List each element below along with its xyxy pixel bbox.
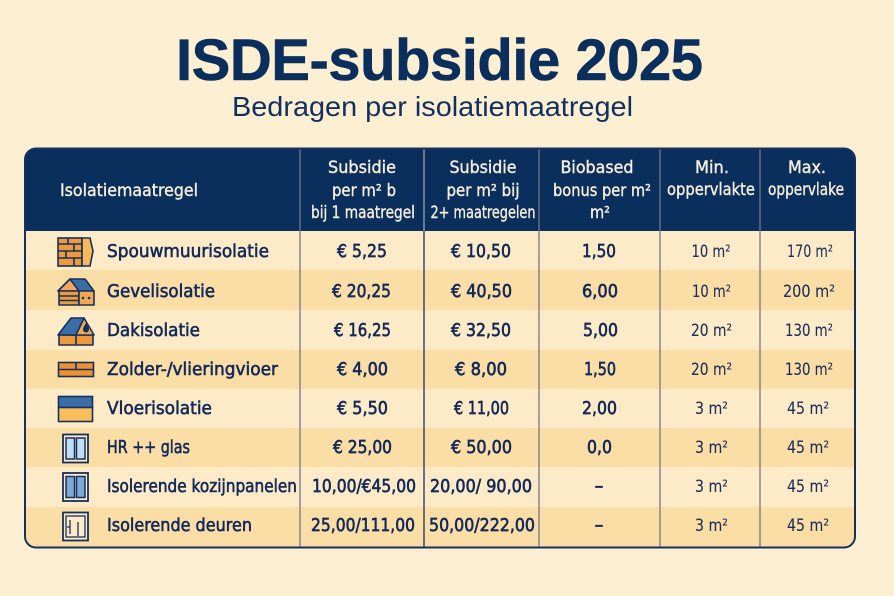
row: Spouwmuurisolatie: 170 m² <box>787 242 833 262</box>
row: Dakisolatie: € 32,50 <box>451 321 511 341</box>
row: Isolerende deuren: 3 m² <box>695 516 728 536</box>
icon: house with roof insulation <box>58 318 94 345</box>
header labels: Isolatiemaatregel <box>60 181 198 200</box>
row: Dakisolatie <box>58 318 833 345</box>
icon drop <box>83 323 89 332</box>
icon dots <box>82 297 90 299</box>
header labels: 2+ maatregelen <box>430 203 536 222</box>
row: Gevelisolatie <box>58 279 835 305</box>
row: Isolerende deuren: 50,00/222,00 <box>429 516 535 536</box>
column dividers <box>300 148 760 547</box>
row: HR ++ glas: 0,0 <box>587 438 612 458</box>
row: Spouwmuurisolatie: 10 m² <box>692 242 730 262</box>
header labels: bonus per m² <box>553 181 651 200</box>
header labels: Subsidie <box>450 158 516 177</box>
header labels: per m² bij <box>446 181 520 200</box>
header labels: Biobased <box>560 158 634 177</box>
row bands <box>25 270 855 547</box>
row: Isolerende kozijnpanelen: 20,00/ 90,00 <box>430 477 532 497</box>
table body background <box>25 149 855 548</box>
row: Spouwmuurisolatie <box>58 238 833 266</box>
row: Gevelisolatie: € 40,50 <box>451 282 512 302</box>
header labels: per m² b <box>332 181 396 200</box>
row: Gevelisolatie: Gevelisolatie <box>107 282 215 302</box>
row: Zolder-/vlieringvloer: € 4,00 <box>337 360 388 380</box>
subtitle: Bedragen per isolatiemaatregel <box>232 91 633 122</box>
row: Vloerisolatie: € 11,00 <box>454 399 509 419</box>
row: Isolerende kozijnpanelen: Isolerende kozijnpanelen <box>107 477 297 497</box>
row: Isolerende kozijnpanelen: – <box>595 477 603 497</box>
row: Isolerende kozijnpanelen <box>63 473 829 501</box>
title: ISDE-subsidie 2025 <box>176 28 703 93</box>
row: Gevelisolatie: € 20,25 <box>332 282 391 302</box>
table header background <box>25 148 855 231</box>
row: HR ++ glas: € 50,00 <box>451 438 512 458</box>
row: Spouwmuurisolatie: € 10,50 <box>451 242 511 262</box>
row: HR ++ glas: 45 m² <box>787 438 829 458</box>
row: Gevelisolatie: 6,00 <box>582 282 618 302</box>
icon: window frame panels <box>63 473 88 501</box>
row: HR ++ glas: HR ++ glas <box>107 438 190 458</box>
header labels: Max. <box>788 158 826 177</box>
table <box>25 148 855 548</box>
row: Isolerende deuren: 45 m² <box>787 516 829 536</box>
row: Dakisolatie: Dakisolatie <box>107 321 200 341</box>
row: Gevelisolatie: 200 m² <box>783 282 835 302</box>
row: Gevelisolatie: 10 m² <box>692 282 731 302</box>
row: Zolder-/vlieringvloer: € 8,00 <box>455 360 507 380</box>
row: Isolerende deuren: 25,00/111,00 <box>311 516 415 536</box>
icon: floor insulation <box>58 396 92 422</box>
row: Spouwmuurisolatie: € 5,25 <box>337 242 387 262</box>
row: Isolerende kozijnpanelen: 10,00/€45,00 <box>312 477 416 497</box>
row: Zolder-/vlieringvloer: 20 m² <box>691 360 732 380</box>
row: Spouwmuurisolatie: Spouwmuurisolatie <box>107 242 269 262</box>
icon: double glazed window <box>63 434 88 462</box>
row: Isolerende kozijnpanelen: 45 m² <box>787 477 829 497</box>
row: Zolder-/vlieringvloer: 1,50 <box>584 360 616 380</box>
header labels: Min. <box>695 158 729 177</box>
row: Isolerende deuren <box>63 512 829 540</box>
row: HR ++ glas: € 25,00 <box>333 438 392 458</box>
row: Vloerisolatie: Vloerisolatie <box>107 399 212 419</box>
icon: house with facade insulation <box>58 279 94 305</box>
row: Vloerisolatie: 2,00 <box>582 399 617 419</box>
row: Isolerende deuren: – <box>595 516 603 536</box>
header labels: bij 1 maatregel <box>311 203 415 222</box>
icon: brick wall with insulation <box>58 238 93 266</box>
header labels: Subsidie <box>328 158 396 177</box>
row: Vloerisolatie: 3 m² <box>695 399 728 419</box>
row: Dakisolatie: 5,00 <box>583 321 618 341</box>
row: Zolder-/vlieringvloer: Zolder-/vlieringvioer <box>107 360 279 380</box>
header labels: oppervlakte <box>667 180 755 199</box>
row: Spouwmuurisolatie: 1,50 <box>582 242 616 262</box>
row: Zolder-/vlieringvloer <box>58 360 833 380</box>
header labels <box>60 158 844 222</box>
row: Vloerisolatie: 45 m² <box>787 399 829 419</box>
row: Isolerende kozijnpanelen: 3 m² <box>695 477 728 497</box>
row: HR ++ glas <box>63 434 829 462</box>
row: Zolder-/vlieringvloer: 130 m² <box>785 360 833 380</box>
icon: attic floor planks <box>58 362 94 376</box>
header labels: m² <box>590 203 610 222</box>
row: Dakisolatie: 20 m² <box>691 321 732 341</box>
row: Dakisolatie: € 16,25 <box>334 321 391 341</box>
row: Isolerende deuren: Isolerende deuren <box>107 516 252 536</box>
row: HR ++ glas: 3 m² <box>695 438 728 458</box>
table outline <box>25 148 855 548</box>
row: Vloerisolatie <box>58 396 829 422</box>
row: Dakisolatie: 130 m² <box>785 321 833 341</box>
header labels: oppervlake <box>768 180 844 199</box>
icon: insulated door <box>63 512 88 540</box>
row: Vloerisolatie: € 5,50 <box>337 399 388 419</box>
